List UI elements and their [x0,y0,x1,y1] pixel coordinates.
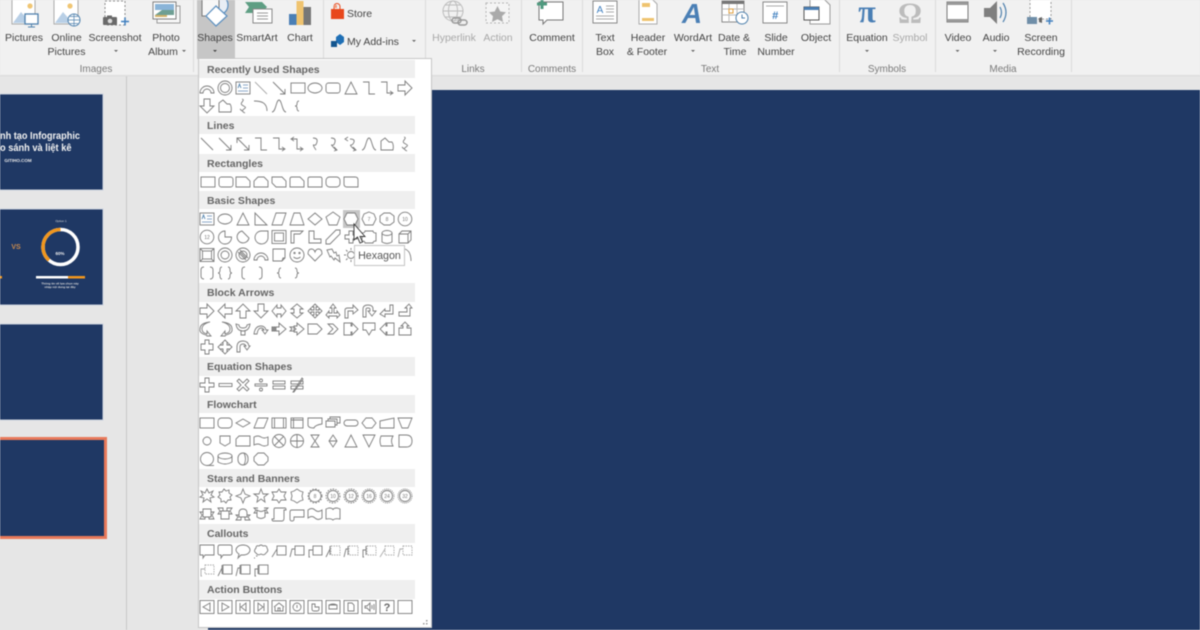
ribbon background [0,0,1200,76]
icon: pictures [12,0,38,27]
slide thumbnail 1: nh tạo Infographic [0,130,80,142]
section header: flowchart [199,395,415,413]
ribbon labels: symbols and media groups: Equation [846,32,888,44]
section header: equation shapes: Equation Shapes [207,361,292,373]
slide thumbnail 2: 60% [55,251,65,256]
ribbon labels: add-ins group: My Add-ins [347,36,399,48]
icon: hyperlink [443,1,467,25]
section header: action buttons: Action Buttons [207,584,282,596]
slide thumbnail 3 [0,324,103,420]
section header: equation shapes [199,357,415,376]
ribbon labels: symbols and media groups: Symbols [868,64,906,75]
icon: text box [593,1,617,23]
basic shape icons: 10 [402,217,408,223]
section header: basic shapes: Basic Shapes [207,195,275,207]
ribbon labels: text group: Text [595,32,615,44]
ribbon labels: text group [595,32,831,75]
ribbon labels: symbols and media groups: Media [989,64,1017,75]
icon: date and time [722,1,748,24]
rectangle shape icons [201,177,358,187]
slide thumbnail 2: nhập nội dung tại đây [44,285,76,289]
ribbon labels: images group: Photo [152,32,180,44]
block arrow icons [200,304,412,354]
ribbon labels: add-ins group: Store [347,8,372,20]
slide thumbnail 1: GITIHO.COM [4,158,32,163]
ribbon labels: illustrations group: Chart [287,32,313,44]
slide thumbnail 1 [0,94,103,190]
ribbon labels: text group: Number [757,46,795,58]
ribbon group separators [193,0,1072,72]
ribbon labels: images group: Online [51,32,82,44]
icon: store [331,4,344,19]
equation shape icons [200,378,303,392]
slide thumbnail 2: Option 1 [55,219,67,223]
ribbon labels: illustrations group: SmartArt [236,32,278,44]
section header: rectangles: Rectangles [207,158,263,170]
section header: stars and banners: Stars and Banners [207,473,300,485]
section header: recently used shapes: Recently Used Shapes [207,64,320,76]
section header: flowchart: Flowchart [207,399,257,411]
icon: object [804,0,830,24]
star and banner icons: 12 [348,494,354,500]
action button icons [200,600,412,614]
ribbon labels: illustrations group [197,32,313,52]
star and banner icons: 32 [402,494,408,500]
basic shape icons: 7 [368,217,371,223]
section header: basic shapes [199,191,415,209]
slide thumbnail 4 selected [0,438,106,538]
tooltip: hexagon [354,246,404,266]
ribbon labels: symbols and media groups: Audio [983,32,1010,44]
slide canvas [208,90,1200,630]
icon: shapes [202,0,228,26]
action button icons: ? [384,602,391,614]
ribbon labels: text group: Slide [764,32,788,44]
ribbon labels: images group: Pictures [5,32,43,44]
slide thumbnail 2 [0,209,103,305]
section header: action buttons [199,580,415,599]
basic shape icons [200,212,412,279]
menu panel [198,58,432,628]
section header: block arrows [199,283,415,302]
icon: photo album [153,2,180,23]
ribbon labels: links and comments groups [432,32,576,75]
flowchart shape icons [200,417,412,466]
icon: chart [289,1,311,25]
ribbon labels: symbols and media groups: Symbol [892,32,928,44]
section header: rectangles [199,154,415,172]
ribbon labels: links and comments groups: Comment [529,32,575,44]
ribbon labels: text group: & Footer [627,46,668,58]
ribbon labels: links and comments groups: Comments [528,64,576,75]
shapes dropdown menu [198,58,432,628]
basic shape icons: 12 [204,235,210,241]
basic shape icons: 8 [386,217,389,223]
icon: audio [984,1,1006,24]
slide thumbnail 1: o sánh và liệt kê [0,142,72,154]
ribbon labels: text group: Box [596,46,615,58]
slide thumbnail 2: VS [11,244,21,251]
section header: lines: Lines [207,120,235,132]
icon: comment [537,0,563,24]
icon: screenshot [103,1,129,26]
ribbon labels: symbols and media groups [846,32,1065,75]
tooltip: hexagon: Hexagon [358,250,401,262]
section header: block arrows: Block Arrows [207,287,274,299]
icon: header and footer [639,0,657,24]
ribbon labels: images group [5,32,186,75]
line shape icons [201,137,407,151]
icon: screen recording [1027,0,1053,24]
callout shape icons [200,545,412,576]
ribbon labels: text group: Object [801,32,831,44]
ribbon labels: links and comments groups: Action [483,32,513,44]
ribbon labels: symbols and media groups: Screen [1024,32,1058,44]
thumbnail pane divider [126,76,127,630]
icon: slide number: # [772,10,779,22]
ribbon labels: text group: WordArt [674,32,712,44]
section header: stars and banners [199,469,415,487]
icon: online pictures [54,0,80,26]
star and banner icons [200,489,412,521]
recently used shape icons [200,81,412,113]
ribbon labels: illustrations group: Shapes [197,32,233,44]
ribbon labels: text group: Header [631,32,666,44]
ribbon labels: images group: Album [148,46,178,58]
section header: recently used shapes [199,60,415,78]
icon: mouse cursor [354,224,365,243]
icon: text box: A [597,5,604,16]
star and banner icons: 8 [314,494,317,500]
menu resize grip [423,620,428,624]
ribbon labels: links and comments groups: Links [461,64,485,75]
section header: lines [199,116,415,134]
ribbon labels: add-ins group [347,8,416,48]
ribbon labels: text group: Date & [718,32,750,44]
ribbon labels: images group: Images [80,64,112,75]
ribbon labels: text group: Text [701,64,719,75]
section header: callouts: Callouts [207,528,249,540]
star and banner icons: 10 [330,494,336,500]
hexagon highlight [343,210,360,228]
ribbon labels: text group: Time [724,46,747,58]
star and banner icons: 16 [366,494,372,500]
icon: slide number [763,2,787,23]
icon: action [486,3,509,23]
section header: callouts [199,524,415,543]
ribbon labels: symbols and media groups: Video [945,32,971,44]
icon: smartart [245,2,272,23]
shapes button highlight [197,0,235,59]
ribbon labels: links and comments groups: Hyperlink [432,32,477,44]
star and banner icons: 24 [384,494,390,500]
ribbon labels: images group: Screenshot [88,32,142,44]
icon: my add-ins [331,34,344,47]
ribbon labels: symbols and media groups: Recording [1017,46,1065,58]
slide thumbnail 2: Thông tin về lựa chọn này [41,282,79,286]
icon: video [947,2,968,22]
ribbon labels: images group: Pictures [48,46,85,58]
